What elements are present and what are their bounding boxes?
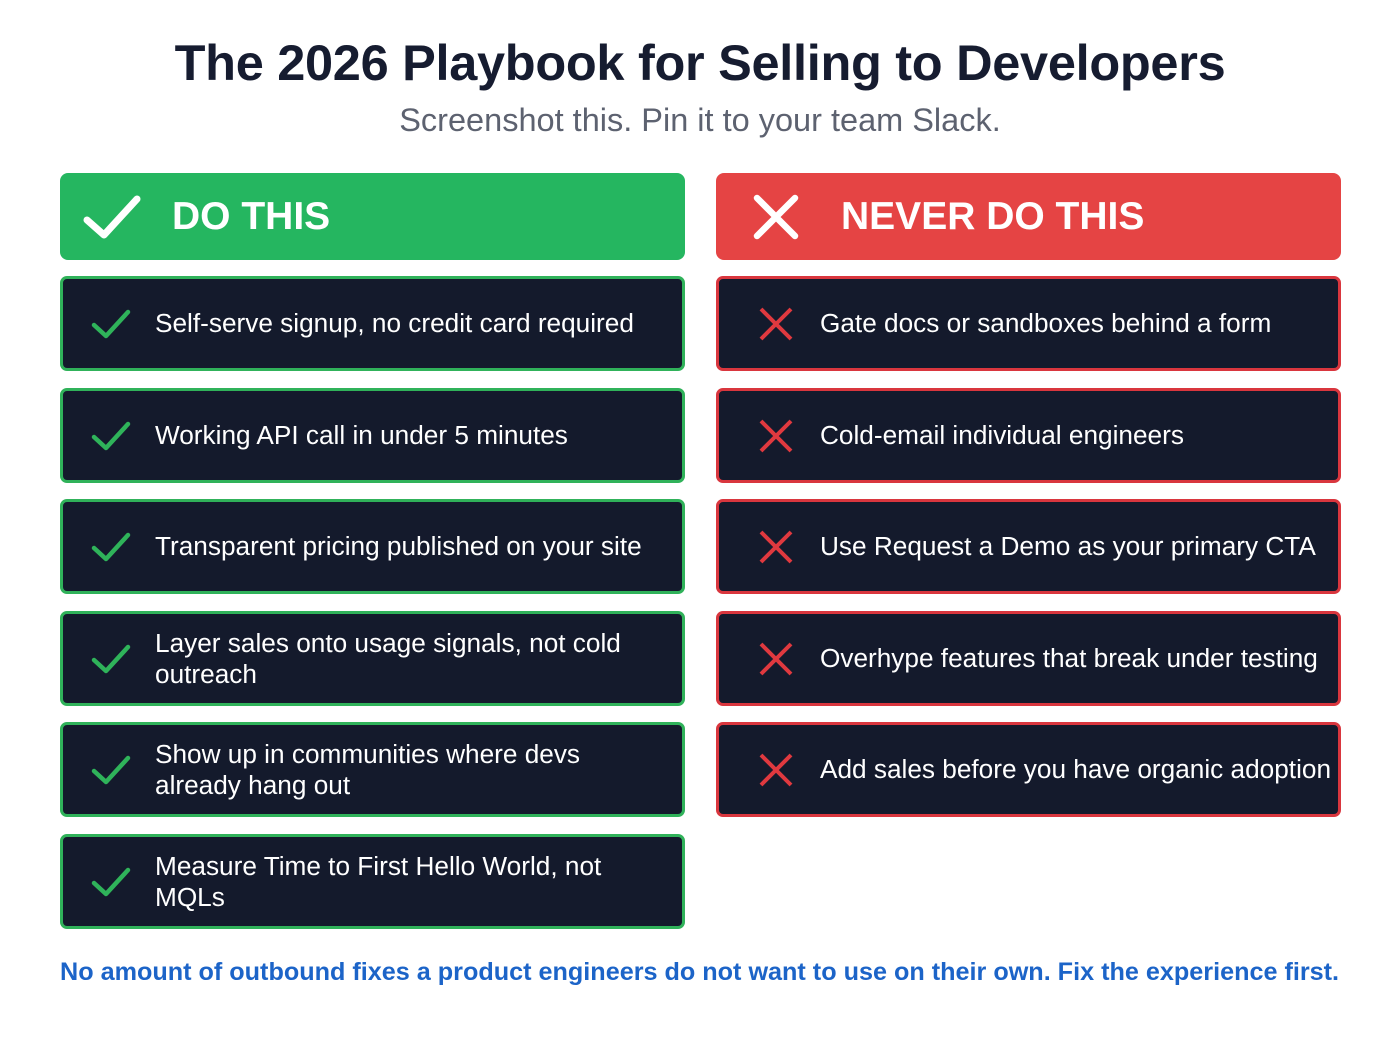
do list (60, 276, 685, 929)
do item 5: Show up in communities where devs (155, 738, 580, 768)
do item 6 (60, 834, 685, 929)
panel: do this header (60, 173, 685, 260)
never item 1 (716, 276, 1341, 371)
do item 1 (60, 276, 685, 371)
never item 1: Gate docs or sandboxes behind a form (820, 308, 1271, 338)
never list (716, 276, 1341, 817)
do item 3 (60, 499, 685, 594)
do item 3: Transparent pricing published on your site (155, 531, 642, 561)
never item 5 (716, 722, 1341, 817)
do item 4 (60, 611, 685, 706)
never item 5: Add sales before you have organic adoption (820, 754, 1331, 784)
panel: never do this header (716, 173, 1341, 260)
never item 4: Overhype features that break under testing (820, 643, 1318, 673)
do item 2 (60, 388, 685, 483)
subtitle: Screenshot this. Pin it to your team Slack. (399, 102, 1001, 138)
do item 2: Working API call in under 5 minutes (155, 420, 568, 450)
panel: never do this header: NEVER DO THIS (841, 194, 1144, 238)
do item 6: MQLs (155, 882, 225, 912)
never item 3: Use Request a Demo as your primary CTA (820, 531, 1316, 561)
title: The 2026 Playbook for Selling to Developers (175, 34, 1225, 91)
panel: do this header: DO THIS (172, 194, 330, 238)
never item 2 (716, 388, 1341, 483)
do item 4: outreach (155, 658, 257, 688)
do item 1: Self-serve signup, no credit card required (155, 308, 634, 338)
never item 2: Cold-email individual engineers (820, 420, 1184, 450)
do item 5 (60, 722, 685, 817)
do item 5: already hang out (155, 770, 350, 800)
never item 3 (716, 499, 1341, 594)
footer callout: No amount of outbound fixes a product engineers do not want to use on their own. Fix the experience first. (60, 958, 1339, 986)
do item 6: Measure Time to First Hello World, not (155, 850, 601, 880)
do item 4: Layer sales onto usage signals, not cold (155, 628, 621, 658)
never item 4 (716, 611, 1341, 706)
